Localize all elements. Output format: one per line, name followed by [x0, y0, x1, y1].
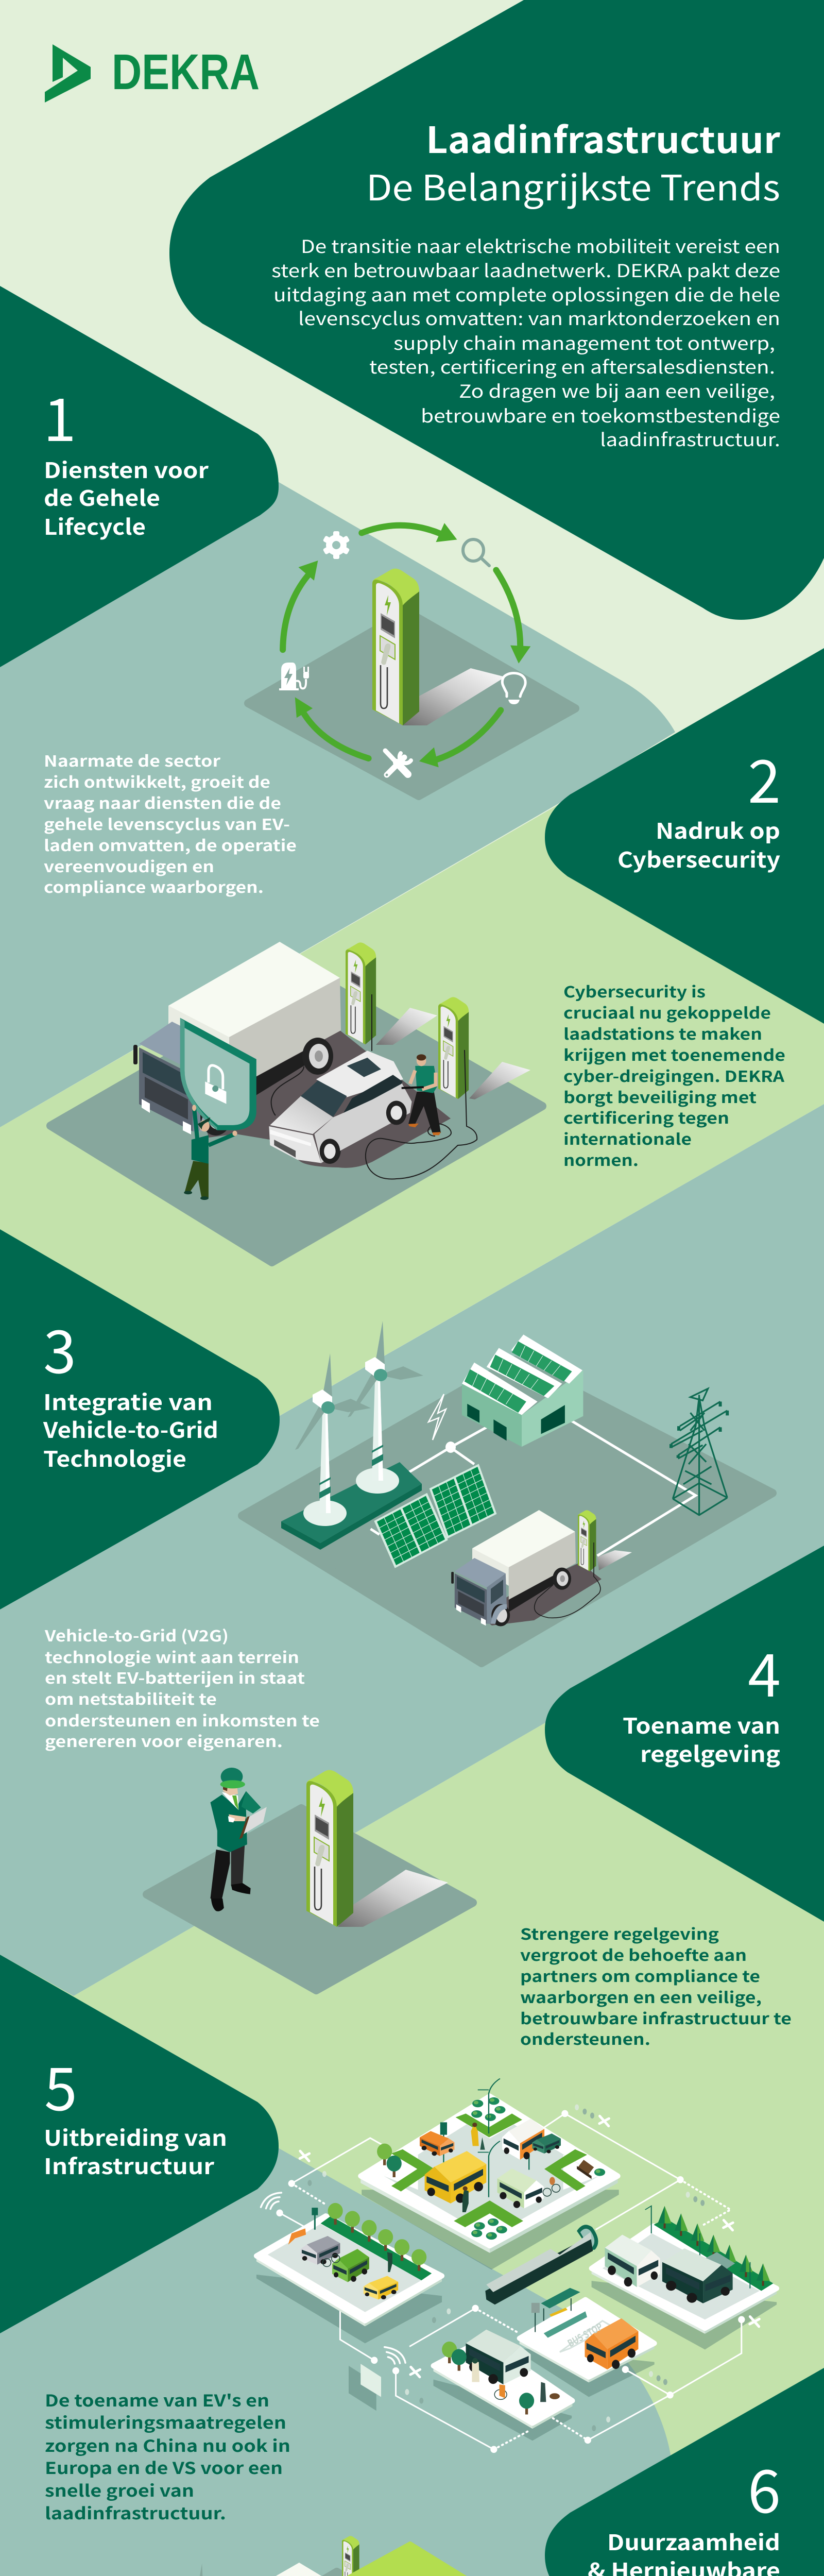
text block: section 1: gehele levenscyclus van EV- — [44, 812, 290, 835]
text block: section 3: technologie wint aan terrein — [45, 1645, 299, 1668]
text block: introduction: testen, certificering en aftersalesdiensten. — [369, 353, 775, 379]
shield with padlock — [180, 1018, 256, 1130]
heading: section 2: 2 — [748, 735, 781, 820]
text block: section 5: Europa en de VS voor een — [45, 2455, 283, 2479]
panel: section 2 tab — [545, 648, 824, 1024]
device plate — [360, 2364, 381, 2397]
charger shadows — [376, 1008, 530, 1099]
text block: section 1 — [44, 749, 297, 897]
platform diamond — [50, 975, 542, 1262]
network lines — [280, 2113, 742, 2449]
text block: section 2: krijgen met toenemende — [563, 1043, 785, 1065]
platform: bus stop — [520, 2288, 655, 2382]
heading: section 1: 1 — [43, 373, 76, 459]
logo: DEKRA: DEKRA — [112, 44, 260, 100]
text block: section 3: en stelt EV-batterijen in staat — [45, 1666, 305, 1688]
charger shadow — [338, 1870, 448, 1927]
text block: section 2: Cybersecurity is — [563, 979, 706, 1002]
text block: section 5: laadinfrastructuur. — [45, 2501, 226, 2524]
truck — [133, 942, 341, 1136]
scene 1: lifecycle charger with cycle arrows — [248, 523, 575, 796]
lightning icon — [428, 1394, 446, 1440]
icon: wrench and screwdriver — [385, 751, 411, 776]
heading: section 5 — [44, 2042, 227, 2181]
charging floor shadow — [196, 1030, 451, 1168]
title: De Belangrijkste Trends — [366, 160, 780, 211]
solar panels — [374, 1464, 496, 1568]
grid connection lines — [371, 1418, 696, 1556]
charger A — [346, 942, 376, 1044]
text block: section 1: laden omvatten, de operatie — [44, 833, 297, 856]
heading: section 4 — [623, 1629, 781, 1769]
inspector figure — [210, 1768, 267, 1911]
heading: section 3: Technologie — [43, 1442, 186, 1473]
text block: section 2 — [563, 979, 785, 1171]
icon: gear — [323, 531, 350, 559]
text block: section 2: laadstations te maken — [563, 1022, 762, 1044]
platform diamond — [147, 1808, 473, 1990]
text block: introduction: laadinfrastructuur. — [600, 426, 780, 452]
articulated bus and tunnel — [485, 2225, 598, 2304]
truck — [451, 1510, 576, 1626]
heading: section 2: Nadruk op — [656, 814, 780, 845]
header panel: dark green hero shape — [169, 0, 824, 620]
scene 6: sustainable charging forecourt — [50, 2536, 564, 2576]
back charger — [342, 2536, 359, 2576]
text block: introduction: De transitie naar elektrische mobiliteit vereist een — [301, 232, 780, 259]
icon: EV charger — [279, 663, 309, 690]
platform: bus line — [592, 2206, 777, 2334]
platform: passengers — [433, 2330, 572, 2429]
heading: section 3: Vehicle-to-Grid — [43, 1413, 218, 1445]
text block: section 2: certificering tegen — [563, 1106, 729, 1128]
text block: section 5: zorgen na China nu ook in — [45, 2433, 290, 2457]
text block: section 2: cruciaal nu gekoppelde — [563, 1001, 771, 1023]
text block: section 4: vergroot de behoefte aan — [520, 1943, 747, 1965]
charger shadow — [403, 668, 505, 725]
text block: section 3: Vehicle-to-Grid (V2G) — [44, 1623, 229, 1646]
heading: section 5: 5 — [44, 2042, 77, 2128]
text block: introduction: betrouwbare en toekomstbestendige — [421, 402, 780, 428]
bus stop road marking: BUS STOP — [565, 2319, 605, 2350]
text block: introduction: sterk en betrouwbaar laadnetwerk. DEKRA pakt deze — [271, 257, 780, 283]
small data ovals — [307, 2104, 705, 2431]
text block: section 4: partners om compliance te — [520, 1964, 760, 1987]
platform diamond — [50, 2572, 561, 2576]
heading: section 4: Toename van — [623, 1709, 780, 1740]
transmission pylon — [671, 1388, 727, 1515]
panel: section 3 tab — [0, 1229, 280, 1609]
heading: section 3 — [43, 1305, 218, 1473]
grid junction — [445, 1442, 456, 1453]
text block: section 3: om netstabiliteit te — [45, 1687, 217, 1709]
text block: section 3: ondersteunen en inkomsten te — [45, 1708, 320, 1731]
text block: section 1: vraag naar diensten die de — [44, 791, 281, 814]
text block: introduction: Zo dragen we bij aan een veilige, — [459, 377, 775, 403]
text block: section 2: borgt beveiliging met — [563, 1085, 757, 1108]
heading: section 1: Lifecycle — [44, 510, 146, 541]
scene 3: vehicle-to-grid — [242, 1321, 772, 1663]
text block: section 3: genereren voor eigenaren. — [45, 1729, 283, 1752]
text block: section 2: internationale — [563, 1127, 692, 1149]
text block: section 1: compliance waarborgen. — [44, 875, 264, 897]
scene 2: truck, car, shield and chargers — [50, 942, 542, 1262]
person with charger nozzle — [402, 1054, 441, 1135]
heading: section 6 — [588, 2445, 781, 2576]
panel: section 1 tab — [0, 286, 279, 667]
icon: magnifier — [463, 539, 489, 566]
text block: section 5: stimuleringsmaatregelen — [45, 2410, 286, 2434]
heading: section 3: Integratie van — [43, 1385, 213, 1417]
plus markers — [300, 2116, 759, 2377]
charging station — [306, 1770, 353, 1927]
text block: section 1: vereenvoudigen en — [44, 854, 214, 877]
text block: introduction: uitdaging aan met complete oplossingen die de hele — [273, 281, 780, 307]
charging station — [578, 1510, 596, 1571]
text block: section 2: cyber-dreigingen. DEKRA — [563, 1064, 785, 1087]
heading: section 1: de Gehele — [44, 481, 160, 513]
charger shadow — [597, 1550, 632, 1570]
text block: introduction: supply chain management tot ontwerp, — [393, 329, 775, 355]
text block: section 4: Strengere regelgeving — [520, 1922, 719, 1944]
heading: section 4: 4 — [748, 1629, 781, 1714]
person holding shield — [184, 1105, 237, 1200]
charging cable — [535, 1543, 600, 1618]
truck — [213, 2563, 335, 2576]
canopy roof — [321, 2544, 564, 2576]
solar building — [462, 1334, 583, 1447]
text block: section 1: Naarmate de sector — [44, 749, 221, 771]
text block: section 1: zich ontwikkelt, groeit de — [44, 770, 270, 792]
text block: section 5 — [45, 2388, 290, 2524]
panel: section 6 tab — [545, 2368, 824, 2576]
text block: introduction: levenscyclus omvatten: van marktonderzoeken en — [298, 304, 780, 331]
panel: section 5 tab — [0, 1955, 279, 2333]
heading: section 6: 6 — [748, 2445, 781, 2530]
turbine platform — [281, 1462, 422, 1550]
charging cable — [271, 994, 477, 1179]
platform diamond — [248, 612, 575, 796]
charging station — [372, 569, 419, 725]
heading: section 4: regelgeving — [640, 1737, 780, 1769]
text block: section 4 — [520, 1922, 792, 2049]
title: Laadinfrastructuur — [426, 112, 781, 164]
panel: section 4 tab — [545, 1546, 824, 1922]
scene 5: connected city infrastructure — [256, 2079, 777, 2453]
cycle arrows — [283, 523, 530, 767]
icon: light bulb — [502, 673, 525, 704]
heading: section 5: Uitbreiding van — [44, 2121, 227, 2153]
text block: section 3 — [44, 1623, 320, 1752]
text block: section 4: betrouwbare infrastructuur te — [520, 2006, 792, 2029]
dotted links — [291, 2180, 731, 2449]
truck floor shadow — [479, 1563, 602, 1625]
car — [269, 1050, 412, 1164]
network nodes — [276, 2110, 745, 2453]
logo: DEKRA — [45, 44, 260, 103]
heading: section 1: Diensten voor — [44, 453, 209, 485]
charger B — [438, 997, 469, 1099]
wind turbines — [295, 1321, 423, 1513]
platform: parking — [256, 2203, 442, 2326]
text block: section 5: De toename van EV's en — [45, 2388, 269, 2412]
platform shadows — [256, 2190, 777, 2441]
text block: section 5: snelle groei van — [45, 2478, 194, 2502]
platform: intersection — [360, 2079, 618, 2253]
text block: section 2: normen. — [563, 1148, 639, 1171]
heading: section 5: Infrastructuur — [44, 2149, 215, 2181]
scene 4: inspector with charger — [147, 1768, 473, 1990]
pedestrians — [462, 2123, 560, 2212]
text block: section 4: ondersteunen. — [520, 2027, 650, 2049]
heading: section 1 — [43, 373, 209, 541]
wifi icons — [261, 2193, 405, 2364]
title — [366, 112, 781, 211]
heading: section 6: Duurzaamheid — [607, 2526, 780, 2557]
text block: introduction — [271, 232, 780, 452]
wind turbines — [128, 2564, 235, 2576]
heading: section 3: 3 — [43, 1305, 76, 1391]
heading: section 2 — [617, 735, 781, 874]
vehicles: intersection — [420, 2119, 561, 2209]
text block: section 4: waarborgen en een veilige, — [520, 1985, 762, 2008]
heading: section 2: Cybersecurity — [617, 843, 780, 874]
platform diamond — [242, 1360, 772, 1663]
